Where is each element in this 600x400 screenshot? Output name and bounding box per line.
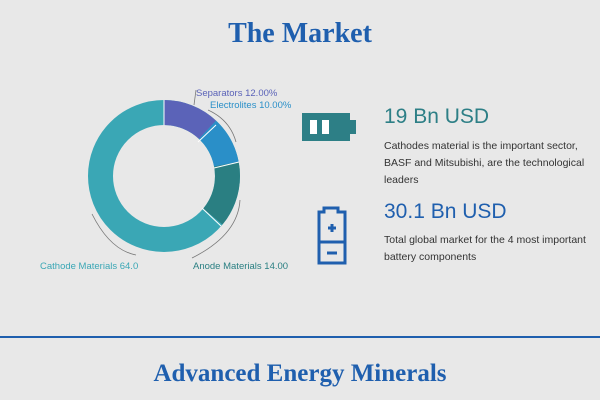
donut chart: Electrolites 10.00% [210,100,292,111]
icon: battery half [302,113,356,141]
stat 2: Total global market for the 4 most important battery components [384,234,586,263]
stat 1: 19 Bn USD [384,105,489,128]
stat 1: Cathodes material is the important sector, BASF and Mitsubishi, are the technological leaders [384,140,584,186]
donut chart: Cathode Materials 64.0 [40,261,138,272]
stat 2 [384,200,586,263]
stat 1 [384,105,584,186]
donut chart: Separators 12.00% [196,88,278,99]
icon: battery vertical [318,206,346,264]
divider [0,336,600,338]
donut chart [40,88,292,272]
stat 2: 30.1 Bn USD [384,200,507,223]
donut chart: Anode Materials 14.00 [193,261,288,272]
section heading: Advanced Energy Minerals [153,360,447,387]
title: The Market [228,18,372,49]
